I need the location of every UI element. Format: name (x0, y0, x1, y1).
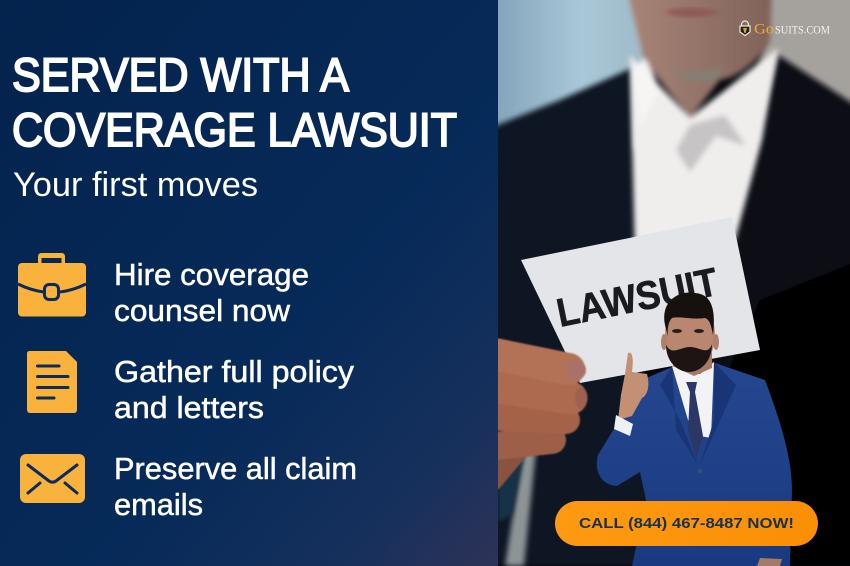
background window blur (480, 0, 850, 150)
call to action button: CALL (844) 467-8487 NOW! (579, 516, 794, 532)
step text: counsel now (114, 293, 291, 328)
blurred shirt, neck and chin (626, 0, 780, 243)
suit body (597, 362, 792, 566)
step text (114, 257, 309, 328)
logo: gosuits.com (740, 21, 830, 38)
neck (673, 350, 712, 376)
step 3: preserve claim emails (20, 451, 357, 522)
subtitle: Your first moves (13, 166, 258, 204)
lawsuit card (521, 217, 760, 383)
logo: gosuits.com: Go (754, 22, 774, 38)
step 1: hire coverage counsel (18, 253, 309, 328)
heading (12, 48, 457, 156)
hair (664, 292, 714, 337)
heading: SERVED WITH A (12, 48, 350, 101)
card word: LAWSUIT (553, 260, 722, 336)
icon: lock shield (740, 21, 750, 36)
icon: briefcase (18, 253, 86, 316)
lapels (660, 362, 736, 465)
hand holding card (480, 352, 587, 490)
panel: photo of man in dark suit holding a lawsuit card (480, 0, 850, 566)
step text (114, 354, 355, 425)
beard (666, 344, 712, 372)
step text: Hire coverage (114, 257, 309, 292)
call to action button (555, 501, 818, 546)
logo: gosuits.com: SUITS.COM (775, 22, 830, 36)
step text: and letters (114, 390, 264, 425)
blurred shirt cuff (505, 450, 536, 566)
shirt (672, 362, 714, 438)
step text (114, 451, 357, 522)
eyes (672, 329, 682, 333)
blurred lip (664, 8, 720, 17)
raised hand (618, 353, 648, 420)
icon: envelope (20, 454, 85, 503)
jacket button (698, 468, 702, 474)
tie (686, 382, 703, 458)
icon: document (27, 351, 77, 413)
cuff (614, 415, 633, 436)
panel: left navy background (0, 0, 498, 566)
foreground attorney in blue suit (597, 292, 792, 566)
step text: Gather full policy (114, 354, 355, 389)
step text: emails (114, 487, 203, 522)
heading: COVERAGE LAWSUIT (12, 103, 457, 156)
step text: Preserve all claim (114, 451, 357, 486)
lower hand (757, 558, 782, 566)
head (665, 317, 715, 354)
blurred jacket (480, 55, 850, 566)
step 2: gather policy and letters (27, 351, 355, 425)
